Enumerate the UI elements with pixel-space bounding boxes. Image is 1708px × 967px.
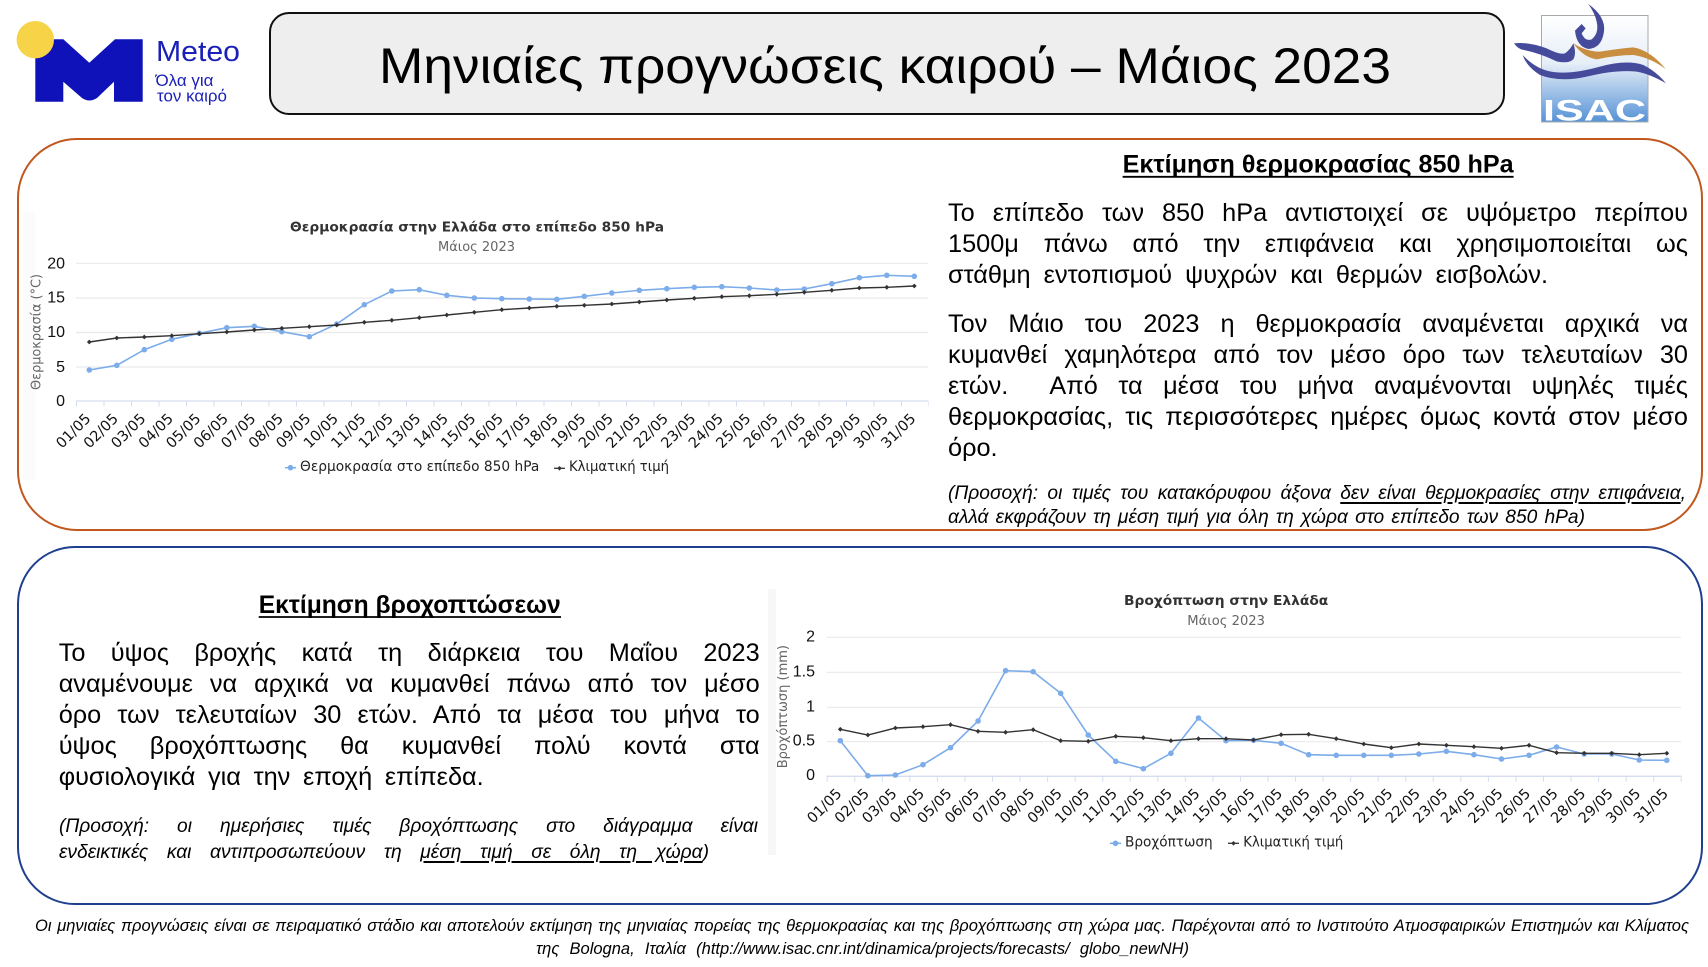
- legend: [1110, 835, 1343, 851]
- x axis labels: 01/05: [804, 786, 845, 827]
- y axis labels: 2: [806, 629, 815, 646]
- y axis labels: 15: [47, 290, 65, 307]
- x axis labels: [804, 786, 1672, 827]
- text block: temperature note: [948, 483, 1686, 528]
- logo wordmark: ISAC: [1543, 95, 1646, 128]
- x axis labels: 12/05: [356, 411, 397, 452]
- text block: rainfall paragraph: ύψος βροχόπτωσης θα κυμανθεί πολύ κοντά στα: [59, 732, 760, 760]
- chart subtitle: Μάιος 2023: [1187, 614, 1265, 629]
- y axis labels: [793, 629, 815, 784]
- x axis labels: 09/05: [273, 411, 314, 452]
- x axis labels: 20/05: [1328, 786, 1369, 827]
- gridlines and axis: [827, 637, 1682, 779]
- x axis labels: 29/05: [1576, 786, 1617, 827]
- gridlines and axis: [76, 263, 929, 404]
- panel: rainfall: [17, 546, 1703, 905]
- x axis labels: 07/05: [970, 786, 1011, 827]
- x axis labels: 27/05: [768, 411, 809, 452]
- text block: rainfall paragraph: φυσιολογικά για την εποχή επίπεδα.: [59, 763, 484, 791]
- x axis labels: 02/05: [81, 411, 122, 452]
- logo square: [1542, 16, 1648, 122]
- text block: temperature paragraphs: [948, 199, 1688, 462]
- footer note: της Bologna, Ιταλία (http://www.isac.cnr.int/dinamica/projects/forecasts/ globo_newNH): [536, 940, 1189, 958]
- x axis labels: 28/05: [1548, 786, 1589, 827]
- x axis labels: 31/05: [878, 411, 919, 452]
- text block: temperature paragraphs: όρο.: [948, 434, 998, 462]
- y axis labels: 20: [47, 255, 65, 272]
- x axis labels: 19/05: [1300, 786, 1341, 827]
- x axis labels: 11/05: [1080, 786, 1121, 827]
- chart backdrop strip: [23, 212, 35, 480]
- x axis labels: 14/05: [411, 411, 452, 452]
- icon: yellow sun: [17, 21, 54, 58]
- x axis labels: 21/05: [603, 411, 644, 452]
- legend: Κλιματική τιμή: [569, 459, 669, 475]
- y axis labels: 1: [806, 699, 815, 716]
- y axis labels: 0: [56, 393, 65, 410]
- series: temperature forecast: [89, 275, 914, 370]
- x axis labels: 03/05: [860, 786, 900, 827]
- x axis labels: 10/05: [301, 411, 342, 452]
- text block: temperature note: αλλά εκφράζουν τη μέση τιμή για όλη τη χώρα στο επίπεδο των 850 hPa): [948, 507, 1585, 528]
- y axis labels: [47, 255, 65, 410]
- panel: temperature: [17, 138, 1703, 531]
- series: climatological value: [840, 725, 1667, 755]
- x axis labels: 19/05: [548, 411, 589, 452]
- x axis labels: 26/05: [741, 411, 782, 452]
- x axis labels: 09/05: [1025, 786, 1066, 827]
- x axis labels: 04/05: [887, 786, 928, 827]
- x axis labels: 10/05: [1052, 786, 1093, 827]
- legend: Βροχόπτωση: [1125, 835, 1213, 851]
- x axis labels: 04/05: [136, 411, 177, 452]
- x axis labels: 02/05: [832, 786, 873, 827]
- footer note: Οι μηνιαίες προγνώσεις είναι σε πειραματικό στάδιο και αποτελούν εκτίμηση της μηνιαίας πορείας της θερμοκρασίας και της βροχόπτωσης στη χώρα μας. Παρέχονται από το Ινστιτούτο Ατμοσφαιρικών Επιστημών και Κλίματος: [35, 917, 1689, 935]
- text block: temperature paragraphs: Το επίπεδο των 850 hPa αντιστοιχεί σε υψόμετρο περίπου: [948, 199, 1688, 227]
- x axis labels: 18/05: [1273, 786, 1314, 827]
- y axis labels: 0: [806, 767, 815, 784]
- y axis title: Θερμοκρασία (°C): [30, 274, 45, 390]
- heading: rainfall: Εκτίμηση βροχοπτώσεων: [259, 591, 561, 619]
- series: climatological value: [89, 286, 914, 342]
- text block: temperature paragraphs: ετών. Από τα μέσα του μήνα αναμένονται υψηλές τιμές: [948, 372, 1688, 400]
- heading: temperature: Εκτίμηση θερμοκρασίας 850 hPa: [1123, 150, 1515, 178]
- chart backdrop strip: [768, 589, 776, 855]
- x axis labels: 25/05: [1466, 786, 1507, 827]
- x axis labels: 17/05: [493, 411, 534, 452]
- y axis labels: 10: [47, 324, 65, 341]
- x axis labels: 14/05: [1163, 786, 1203, 827]
- x axis labels: 03/05: [108, 411, 149, 452]
- x axis labels: 12/05: [1108, 786, 1148, 827]
- x axis labels: 08/05: [997, 786, 1038, 827]
- logo text: Meteo: [156, 36, 240, 68]
- text block: temperature paragraphs: Τον Μάιο του 2023 η θερμοκρασία αναμένεται αρχικά να: [948, 310, 1688, 338]
- icon: blue M: [35, 39, 143, 102]
- text block: rainfall note: (Προσοχή: οι ημερήσιες τιμές βροχόπτωσης στο διάγραμμα είναι: [59, 816, 758, 837]
- legend: Κλιματική τιμή: [1243, 835, 1343, 851]
- text block: temperature paragraphs: κυμανθεί χαμηλότερα από τον μέσο όρο των τελευταίων 30: [948, 341, 1688, 369]
- text block: rainfall note: ενδεικτικές και αντιπροσωπεύουν τη μέση τιμή σε όλη τη χώρα): [59, 842, 709, 863]
- y axis title: Βροχόπτωση (mm): [776, 645, 791, 768]
- logo text: τον καιρό: [157, 88, 227, 106]
- text block: rainfall paragraph: όρο των τελευταίων 30 ετών. Από τα μέσα του μήνα το: [59, 701, 760, 729]
- x axis labels: 25/05: [713, 411, 754, 452]
- x axis labels: 16/05: [466, 411, 507, 452]
- legend: [285, 459, 669, 475]
- x axis labels: 27/05: [1521, 786, 1562, 827]
- logo: Meteo: [17, 21, 240, 106]
- x axis labels: 11/05: [328, 411, 369, 452]
- x axis labels: 29/05: [823, 411, 864, 452]
- chart: temperature at 850 hPa: [23, 212, 929, 480]
- chart title: Θερμοκρασία στην Ελλάδα στο επίπεδο 850 hPa: [290, 220, 664, 236]
- text block: rainfall paragraph: Το ύψος βροχής κατά τη διάρκεια του Μαΐου 2023: [59, 639, 760, 667]
- x axis labels: [53, 411, 919, 452]
- chart subtitle: Μάιος 2023: [438, 240, 515, 255]
- x axis labels: 28/05: [796, 411, 837, 452]
- x axis labels: 30/05: [1603, 786, 1644, 827]
- x axis labels: 05/05: [915, 786, 956, 827]
- logo: ISAC: [1514, 4, 1666, 128]
- text block: temperature paragraphs: στάθμη εντοπισμού ψυχρών και θερμών εισβολών.: [948, 261, 1548, 289]
- text block: temperature paragraphs: θερμοκρασίας, τις περισσότερες ημέρες όμως κοντά στον μέσο: [948, 403, 1688, 431]
- logo swooshes: [1514, 4, 1666, 83]
- x axis labels: 24/05: [1438, 786, 1479, 827]
- x axis labels: 08/05: [246, 411, 287, 452]
- x axis labels: 18/05: [521, 411, 562, 452]
- text block: rainfall paragraph: αναμένουμε να αρχικά να κυμανθεί πάνω από τον μέσο: [59, 670, 760, 698]
- y axis labels: 1.5: [793, 664, 815, 681]
- text block: temperature paragraphs: 1500μ πάνω από την επιφάνεια και χρησιμοποιείται ως: [948, 230, 1688, 258]
- x axis labels: 05/05: [163, 411, 204, 452]
- text block: rainfall note: [59, 816, 758, 863]
- footer note: [35, 917, 1689, 958]
- title: Μηνιαίες προγνώσεις καιρού – Μάιος 2023: [379, 38, 1391, 94]
- chart: rainfall: [768, 589, 1682, 855]
- legend: Θερμοκρασία στο επίπεδο 850 hPa: [300, 459, 539, 475]
- x axis labels: 22/05: [631, 411, 672, 452]
- y axis labels: 5: [56, 359, 65, 376]
- x axis labels: 13/05: [383, 411, 424, 452]
- y axis labels: 0.5: [793, 733, 815, 750]
- x axis labels: 23/05: [658, 411, 699, 452]
- text block: rainfall paragraph: [59, 639, 760, 791]
- x axis labels: 15/05: [438, 411, 479, 452]
- x axis labels: 01/05: [53, 411, 94, 452]
- x axis labels: 07/05: [218, 411, 259, 452]
- x axis labels: 13/05: [1135, 786, 1176, 827]
- text block: temperature note: (Προσοχή: οι τιμές του κατακόρυφου άξονα δεν είναι θερμοκρασίες στην επιφάνεια,: [948, 483, 1686, 504]
- x axis labels: 21/05: [1355, 786, 1396, 827]
- title box: [269, 12, 1505, 115]
- x axis labels: 15/05: [1190, 786, 1231, 827]
- x axis labels: 30/05: [851, 411, 892, 452]
- x axis labels: 31/05: [1631, 786, 1672, 827]
- logo text: Όλα για: [154, 72, 214, 90]
- x axis labels: 23/05: [1411, 786, 1451, 827]
- chart title: Βροχόπτωση στην Ελλάδα: [1124, 593, 1328, 609]
- x axis labels: 17/05: [1245, 786, 1286, 827]
- x axis labels: 06/05: [191, 411, 232, 452]
- x axis labels: 22/05: [1383, 786, 1424, 827]
- series: rainfall forecast: [840, 671, 1667, 776]
- x axis labels: 06/05: [942, 786, 983, 827]
- x axis labels: 26/05: [1493, 786, 1534, 827]
- x axis labels: 24/05: [686, 411, 727, 452]
- x axis labels: 20/05: [576, 411, 617, 452]
- logo text: [154, 36, 240, 106]
- x axis labels: 16/05: [1218, 786, 1259, 827]
